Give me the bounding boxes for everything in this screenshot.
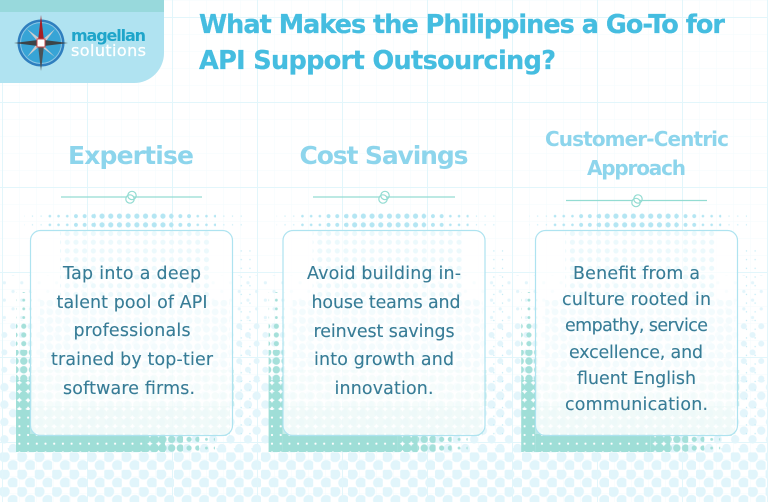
card xyxy=(536,230,738,436)
card text: Benefit from a xyxy=(573,264,700,284)
panel: expertise xyxy=(16,141,252,452)
card text: excellence, and xyxy=(569,343,703,363)
card text: talent pool of API xyxy=(56,293,208,313)
heading: expertise: Expertise xyxy=(68,141,194,170)
card text: empathy, service xyxy=(565,316,708,336)
card xyxy=(283,230,485,436)
heading: cost savings: Cost Savings xyxy=(300,141,468,170)
card text: into growth and xyxy=(314,350,454,370)
card text: fluent English xyxy=(577,369,696,389)
card text xyxy=(51,264,214,399)
panel: customer-centric approach xyxy=(521,127,757,452)
halftone backdrop xyxy=(16,212,252,452)
card text: communication. xyxy=(565,395,708,415)
heading: customer-centric approach xyxy=(545,127,729,180)
panel: cost savings xyxy=(269,141,505,452)
icon: compass logo xyxy=(14,15,68,71)
halftone backdrop xyxy=(269,212,505,452)
title: API Support Outsourcing? xyxy=(199,46,556,76)
card text: Tap into a deep xyxy=(62,264,201,284)
logo wordmark: magellan xyxy=(71,26,146,45)
heading: customer-centric approach: Customer-Centric xyxy=(545,127,729,151)
divider with link icon xyxy=(61,191,202,203)
card text: innovation. xyxy=(334,379,434,399)
divider with link icon xyxy=(313,191,455,203)
logo wordmark: solutions xyxy=(71,41,146,60)
card text: software firms. xyxy=(63,379,195,399)
card text: trained by top-tier xyxy=(51,350,214,370)
title xyxy=(199,10,725,76)
title: What Makes the Philippines a Go-To for xyxy=(199,10,725,40)
card text: professionals xyxy=(74,321,190,341)
card text: culture rooted in xyxy=(562,290,711,310)
heading: customer-centric approach: Approach xyxy=(587,156,686,180)
card text: reinvest savings xyxy=(314,322,454,342)
card xyxy=(30,230,232,436)
halftone backdrop xyxy=(521,212,757,452)
header logo panel xyxy=(0,0,164,83)
card text xyxy=(562,264,711,415)
card text xyxy=(307,264,461,399)
card text: Avoid building in- xyxy=(307,264,461,284)
logo wordmark xyxy=(71,26,146,60)
divider with link icon xyxy=(566,195,707,207)
card text: house teams and xyxy=(312,293,460,313)
